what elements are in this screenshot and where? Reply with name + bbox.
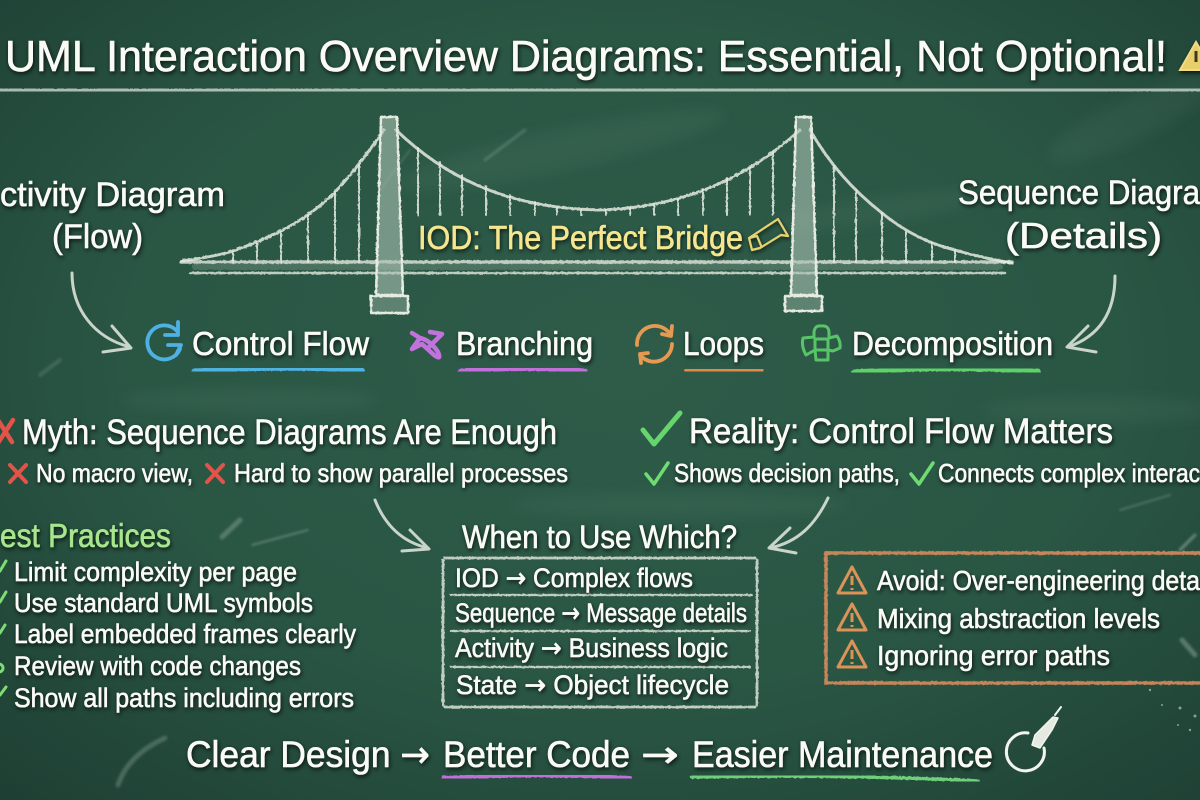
right heading: sequence diagram (958, 174, 1200, 256)
arrow: myth to table (375, 500, 429, 551)
warnings text: Ignoring error paths (877, 640, 1110, 671)
underline: better code (443, 776, 630, 778)
bridge hangers (233, 148, 955, 262)
left heading: activity diagram: ctivity Diagram (0, 176, 225, 214)
best practices list: Review with code changes (14, 651, 301, 681)
panel: myth: Hard to show parallel processes (234, 458, 568, 488)
title underline (0, 89, 1200, 91)
feature: control flow (147, 322, 369, 371)
bridge deck (181, 262, 1012, 273)
icon: green check (911, 463, 933, 484)
icon: green check (646, 463, 668, 484)
icon: green check (643, 413, 680, 444)
bridge towers (371, 117, 822, 313)
heading: when to use which: When to Use Which? (462, 519, 737, 555)
best practices list: Label embedded frames clearly (14, 619, 356, 649)
check marks (0, 561, 6, 695)
heading: bridge label: IOD: The Perfect Bridge (418, 219, 743, 256)
icon: rocket in circle (1006, 707, 1061, 771)
feature: branching: Branching (456, 325, 593, 362)
feature: loops (637, 325, 764, 371)
underline: easier maintenance (692, 776, 978, 781)
feature row (147, 322, 1053, 372)
panel: reality: Reality: Control Flow Matters (689, 412, 1113, 451)
table rows: Activity → Business logic (455, 633, 728, 664)
feature: decomposition: Decomposition (852, 325, 1053, 362)
arrow: activity to features (72, 273, 131, 352)
feature: branching (412, 325, 593, 371)
panel: reality (643, 412, 1200, 488)
bottom takeaway: Better Code (443, 734, 630, 775)
panel: myth (0, 413, 568, 488)
left heading: activity diagram (0, 176, 225, 256)
bottom takeaway (186, 707, 1061, 781)
feature: loops: Loops (683, 325, 764, 362)
panel: myth: Myth: Sequence Diagrams Are Enough (22, 413, 557, 452)
panel: reality: Shows decision paths, (674, 458, 900, 488)
panel: best practices (0, 517, 356, 713)
arrow: reality to table (769, 498, 828, 553)
feature: control flow: Control Flow (192, 325, 369, 362)
bridge illustration (181, 117, 1012, 313)
best practices list (14, 557, 356, 713)
bottom takeaway: Easier Maintenance (692, 734, 993, 775)
panel: when to use which (443, 519, 757, 707)
best practices list: Use standard UML symbols (14, 588, 313, 618)
icon: graduation cap (749, 219, 788, 250)
title: UML Interaction Overview Diagrams: Essential, Not Optional! (5, 32, 1167, 81)
table rows: State → Object lifecycle (456, 670, 729, 701)
icon: red cross (207, 465, 223, 482)
right heading: sequence diagram: (Details) (1005, 215, 1162, 256)
best practices list: Show all paths including errors (14, 683, 354, 713)
bridge cables (181, 130, 1012, 263)
panel: warnings (826, 553, 1200, 683)
bottom takeaway: → (641, 733, 679, 776)
heading: best practices: est Practices (0, 517, 171, 554)
left heading: activity diagram: (Flow) (52, 218, 143, 256)
arrow: sequence to features (1067, 276, 1115, 352)
table rows: IOD → Complex flows (455, 563, 693, 594)
table rows (455, 563, 747, 701)
warnings text: Mixing abstraction levels (877, 603, 1160, 634)
feature: decomposition (802, 325, 1053, 372)
table rows: Sequence → Message details (455, 598, 747, 629)
bottom takeaway: Clear Design → (186, 733, 430, 776)
best practices list: Limit complexity per page (14, 557, 297, 587)
panel: myth: No macro view, (36, 458, 193, 488)
icon: red cross (10, 465, 26, 482)
warnings text (877, 565, 1200, 671)
table frame (443, 558, 757, 707)
icon: warning triangle (1180, 42, 1200, 70)
icon: red cross (0, 420, 13, 443)
warnings frame (826, 553, 1200, 683)
warning icons (838, 567, 866, 667)
